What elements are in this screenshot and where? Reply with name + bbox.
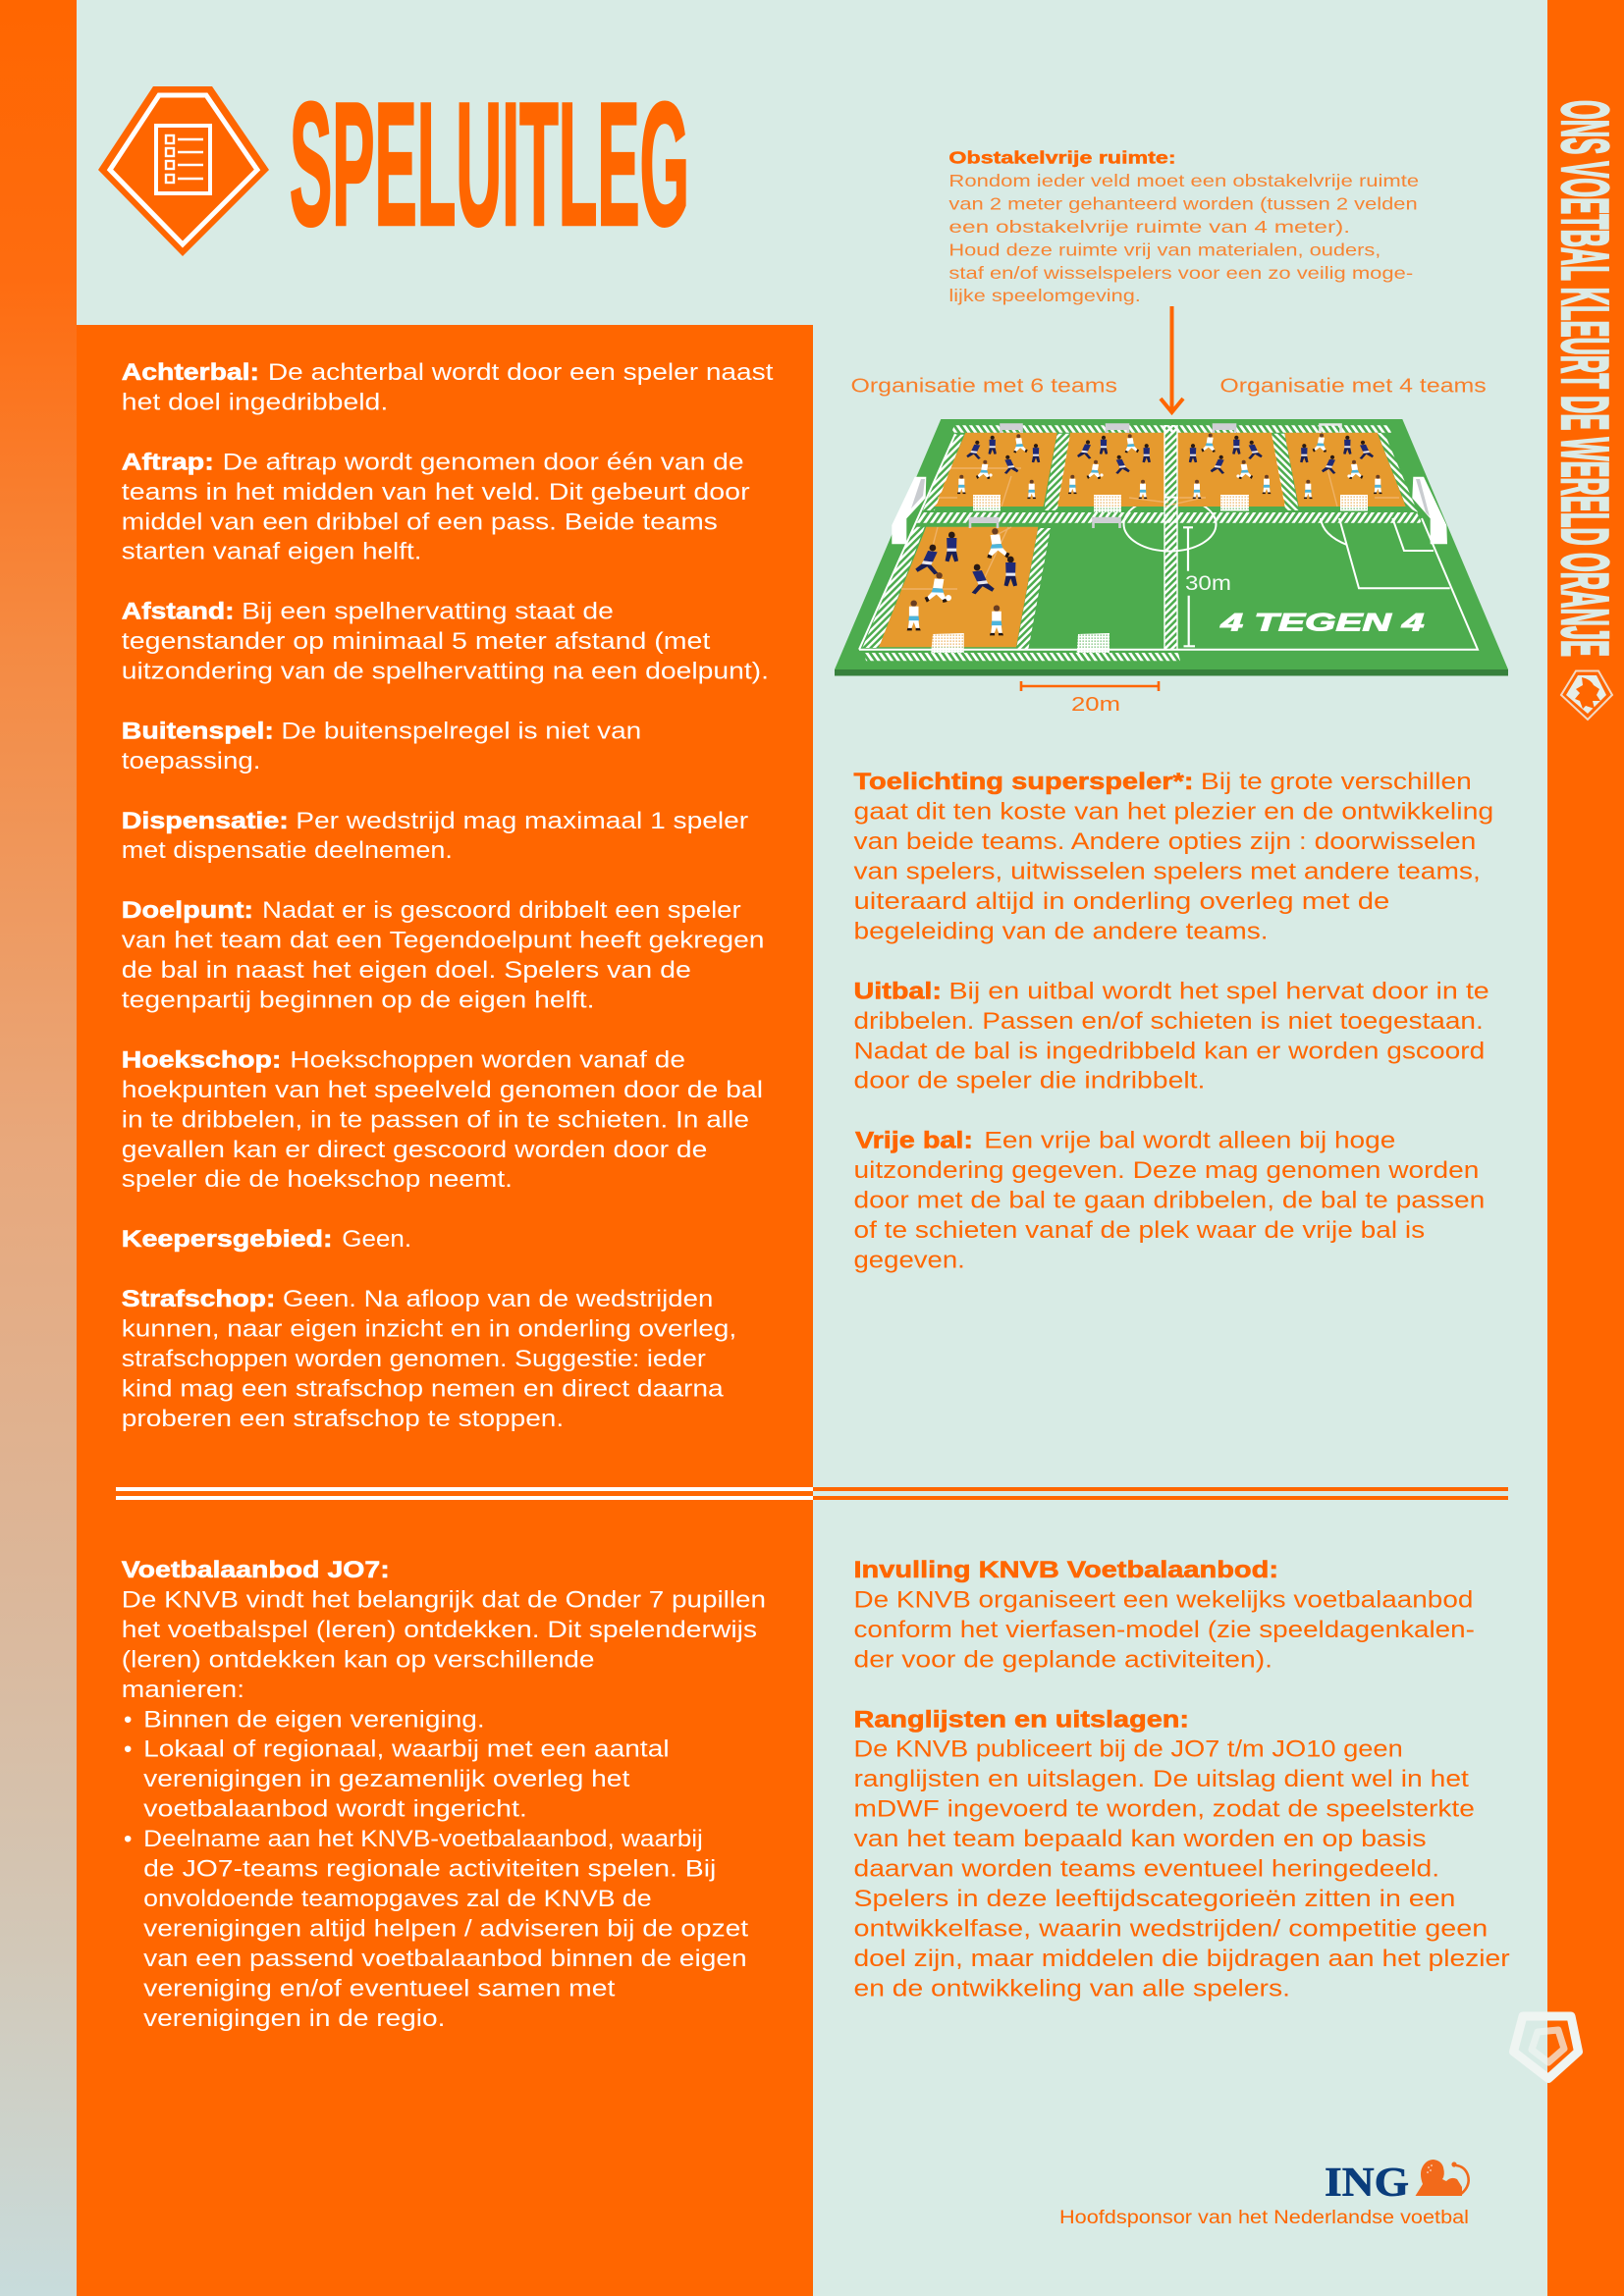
- rule: buitenspel: Buitenspel:: [122, 718, 274, 744]
- text block: obstacle-free space: [948, 147, 1419, 305]
- text block: voetbalaanbod JO7: •: [124, 1736, 132, 1763]
- text block: voetbalaanbod JO7: manieren:: [122, 1677, 244, 1703]
- text block: invulling KNVB voetbalaanbod: conform het vierfasen-model (zie speeldagenkalen-: [853, 1617, 1475, 1643]
- text: SPELUITLEG: [290, 67, 689, 261]
- text block: voetbalaanbod JO7: Voetbalaanbod JO7:: [122, 1557, 390, 1583]
- rule: aftrap: middel van een dribbel of een pass. Beide teams: [122, 508, 718, 535]
- rule: hoekschop: in te dribbelen, in te passen of in te schieten. In alle: [122, 1106, 749, 1133]
- rule: achterbal: [122, 359, 774, 415]
- rule: keepersgebied: Keepersgebied:: [122, 1226, 333, 1253]
- rule: keepersgebied: [122, 1226, 411, 1253]
- text block: voetbalaanbod JO7: •: [124, 1706, 132, 1733]
- rule: vrije bal: gegeven.: [853, 1247, 965, 1273]
- caption: main sponsor: Hoofdsponsor van het Nederlandse voetbal: [1059, 2208, 1469, 2228]
- rule: doelpunt: van het team dat een Tegendoelpunt heeft gekregen: [122, 928, 765, 954]
- goals: [892, 424, 1447, 653]
- label: organisation 4 teams: Organisatie met 4 teams: [1219, 376, 1487, 398]
- text block: voetbalaanbod JO7: [122, 1557, 766, 2032]
- text block: obstacle-free space: Obstakelvrije ruimte:: [948, 147, 1176, 167]
- rule: hoekschop: gevallen kan er direct gescoord worden door de: [122, 1137, 707, 1163]
- rule: doelpunt: de bal in naast het eigen doel. Spelers van de: [122, 957, 691, 984]
- measure: 20m: [1021, 681, 1159, 716]
- hatched team zones: [862, 425, 1422, 661]
- rule: buitenspel: [122, 718, 641, 774]
- text block: ranglijsten en uitslagen: De KNVB publiceert bij de JO7 t/m JO10 geen: [853, 1736, 1403, 1763]
- text block: voetbalaanbod JO7: Lokaal of regionaal, waarbij met een aantal: [143, 1736, 670, 1763]
- text block: voetbalaanbod JO7: verenigingen in de regio.: [143, 2005, 445, 2032]
- rule: strafschop: strafschoppen worden genomen. Suggestie: ieder: [122, 1346, 706, 1372]
- rule: aftrap: starten vanaf eigen helft.: [122, 539, 422, 565]
- rule: superspeler: Bij te grote verschillen: [1201, 769, 1472, 795]
- text block: voetbalaanbod JO7: De KNVB vindt het belangrijk dat de Onder 7 pupillen: [122, 1586, 766, 1613]
- rule: aftrap: Aftrap:: [122, 449, 214, 475]
- text block: voetbalaanbod JO7: het voetbalspel (leren) ontdekken. Dit spelenderwijs: [122, 1617, 757, 1643]
- rule: vrije bal: of te schieten vanaf de plek waar de vrije bal is: [853, 1217, 1425, 1244]
- text: ONS VOETBAL KLEURT DE WERELD ORANJE: [1547, 100, 1622, 657]
- rule: achterbal: De achterbal wordt door een speler naast: [268, 359, 774, 386]
- rule: strafschop: kunnen, naar eigen inzicht en in onderling overleg,: [122, 1316, 736, 1343]
- label: organisation 6 teams: Organisatie met 6 teams: [851, 376, 1117, 398]
- text block: rules right column: [853, 769, 1493, 1273]
- rule: superspeler: van spelers, uitwisselen spelers met andere teams,: [853, 859, 1481, 885]
- rule: superspeler: van beide teams. Andere opties zijn : doorwisselen: [853, 828, 1476, 855]
- rule: vrije bal: Vrije bal:: [855, 1128, 973, 1154]
- icon: pentagon logo on strip edge: [1514, 2016, 1579, 2079]
- text block: ranglijsten en uitslagen: van het team bepaald kan worden en op basis: [853, 1826, 1427, 1852]
- rule: strafschop: Strafschop:: [122, 1286, 275, 1312]
- text block: voetbalaanbod JO7: Deelname aan het KNVB-voetbalaanbod, waarbij: [143, 1826, 703, 1852]
- text block: obstacle-free space: lijke speelomgeving.: [948, 286, 1141, 305]
- rule: hoekschop: hoekpunten van het speelveld genomen door de bal: [122, 1077, 763, 1103]
- measure line: 30m: [1183, 527, 1195, 646]
- rule: strafschop: Geen. Na afloop van de wedstrijden: [283, 1286, 713, 1312]
- text block: ranglijsten en uitslagen: ontwikkelfase, waarin wedstrijden/ competitie geen: [853, 1915, 1488, 1942]
- text block: voetbalaanbod JO7: •: [124, 1826, 132, 1852]
- rule: superspeler: gaat dit ten koste van het plezier en de ontwikkeling: [853, 799, 1493, 826]
- rule: achterbal: het doel ingedribbeld.: [122, 389, 388, 415]
- rule: hoekschop: Hoekschop:: [122, 1047, 281, 1074]
- text block: ranglijsten en uitslagen: en de ontwikkeling van alle spelers.: [853, 1975, 1290, 2002]
- text block: obstacle-free space: staf en/of wisselspelers voor een zo veilig moge-: [948, 263, 1413, 283]
- text block: ranglijsten en uitslagen: Spelers in deze leeftijdscategorieën zitten in een: [853, 1886, 1455, 1912]
- rule: vrije bal: uitzondering gegeven. Deze mag genomen worden: [853, 1157, 1479, 1184]
- rule: vrije bal: Een vrije bal wordt alleen bij hoge: [984, 1128, 1395, 1154]
- rule: buitenspel: De buitenspelregel is niet van: [281, 718, 641, 744]
- text block: voetbalaanbod JO7: de JO7-teams regionale activiteiten spelen. Bij: [143, 1856, 716, 1883]
- rule: afstand: [122, 599, 769, 685]
- rule: keepersgebied: Geen.: [342, 1226, 411, 1253]
- text block: obstacle-free space: Houd deze ruimte vrij van materialen, ouders,: [948, 240, 1380, 259]
- arrow: pointing to field: [1161, 306, 1183, 412]
- label: 4 tegen 4: 4 TEGEN 4: [1219, 609, 1425, 636]
- panel: left orange column: [77, 325, 813, 2296]
- chart: 4 v 4 field layout: [835, 419, 1508, 675]
- left gradient strip: [0, 0, 77, 2296]
- text block: voetbalaanbod JO7: van een passend voetbalaanbod binnen de eigen: [143, 1946, 747, 1972]
- text block: voetbalaanbod JO7: (leren) ontdekken kan op verschillende: [122, 1646, 595, 1673]
- text block: invulling KNVB voetbalaanbod: [853, 1557, 1475, 1673]
- rule: doelpunt: tegenpartij beginnen op de eigen helft.: [122, 988, 595, 1014]
- icon: rules checklist badge: [98, 86, 269, 256]
- icon: KNVB lion badge small: [1561, 671, 1612, 720]
- rule: afstand: Afstand:: [122, 599, 235, 625]
- rule: doelpunt: Doelpunt:: [122, 897, 253, 924]
- rule: afstand: uitzondering van de spelhervatting na een doelpunt).: [122, 659, 769, 685]
- rule: aftrap: teams in het midden van het veld. Dit gebeurt door: [122, 479, 750, 506]
- right orange strip: [1547, 0, 1624, 2296]
- rule: hoekschop: Hoekschoppen worden vanaf de: [290, 1047, 685, 1074]
- rule: aftrap: [122, 449, 750, 565]
- text block: ranglijsten en uitslagen: Ranglijsten en uitslagen:: [853, 1706, 1189, 1733]
- rule: afstand: tegenstander op minimaal 5 meter afstand (met: [122, 628, 711, 655]
- text block: obstacle-free space: van 2 meter gehanteerd worden (tussen 2 velden: [948, 193, 1418, 213]
- rule: uitbal: Bij en uitbal wordt het spel hervat door in te: [948, 978, 1489, 1004]
- text block: ranglijsten en uitslagen: [853, 1706, 1510, 2002]
- rule: afstand: Bij een spelhervatting staat de: [242, 599, 614, 625]
- text block: voetbalaanbod JO7: verenigingen altijd helpen / adviseren bij de opzet: [143, 1915, 748, 1942]
- text block: voetbalaanbod JO7: vereniging en/of eventueel samen met: [143, 1975, 616, 2002]
- text block: voetbalaanbod JO7: Binnen de eigen vereniging.: [143, 1706, 485, 1733]
- text block: voetbalaanbod JO7: voetbalaanbod wordt ingericht.: [143, 1796, 527, 1823]
- pitch base: [835, 419, 1508, 675]
- text block: invulling KNVB voetbalaanbod: der voor de geplande activiteiten).: [853, 1646, 1272, 1673]
- rule: uitbal: [853, 978, 1489, 1095]
- players: [907, 434, 1382, 635]
- full pitch lines: [859, 434, 1478, 650]
- rule: strafschop: proberen een strafschop te stoppen.: [122, 1406, 564, 1432]
- rule: dispensatie: Per wedstrijd mag maximaal 1 speler: [296, 808, 748, 834]
- rule: uitbal: dribbelen. Passen en/of schieten is niet toegestaan.: [853, 1008, 1484, 1035]
- rule: uitbal: door de speler die indribbelt.: [853, 1068, 1205, 1095]
- rule: achterbal: Achterbal:: [122, 359, 259, 386]
- faint lines on mini pitches: [901, 468, 1399, 589]
- rule: doelpunt: [122, 897, 765, 1014]
- text block: ranglijsten en uitslagen: daarvan worden teams eventueel heringedeeld.: [853, 1856, 1439, 1883]
- text block: obstacle-free space: Rondom ieder veld moet een obstakelvrije ruimte: [948, 171, 1419, 190]
- text block: invulling KNVB voetbalaanbod: Invulling KNVB Voetbalaanbod:: [853, 1557, 1278, 1583]
- text block: rules left column: [122, 359, 774, 1432]
- text block: obstacle-free space: een obstakelvrije ruimte van 4 meter).: [948, 217, 1350, 237]
- rule: strafschop: [122, 1286, 736, 1432]
- rule: strafschop: kind mag een strafschop nemen en direct daarna: [122, 1375, 725, 1402]
- text block: ranglijsten en uitslagen: ranglijsten en uitslagen. De uitslag dient wel in het: [853, 1766, 1469, 1792]
- logo: ING lion sponsor: ING: [1325, 2161, 1409, 2206]
- rule: superspeler: [853, 769, 1493, 944]
- rule: uitbal: Uitbal:: [853, 978, 942, 1004]
- rule: dispensatie: met dispensatie deelnemen.: [122, 837, 453, 864]
- orange mini pitches: [879, 433, 1406, 647]
- divider lines: [116, 1487, 1508, 1500]
- rule: uitbal: Nadat de bal is ingedribbeld kan er worden gscoord: [853, 1038, 1485, 1064]
- rule: vrije bal: [853, 1128, 1485, 1273]
- rule: superspeler: begeleiding van de andere teams.: [853, 918, 1269, 944]
- rule: dispensatie: Dispensatie:: [122, 808, 289, 834]
- rule: hoekschop: speler die de hoekschop neemt.: [122, 1166, 513, 1193]
- measure: 20m: 20m: [1071, 694, 1120, 716]
- rule: doelpunt: Nadat er is gescoord dribbelt een speler: [262, 897, 741, 924]
- rule: aftrap: De aftrap wordt genomen door één van de: [223, 449, 744, 475]
- text block: voetbalaanbod JO7: verenigingen in gezamenlijk overleg het: [143, 1766, 630, 1792]
- logo: ING lion sponsor: [1325, 2160, 1469, 2206]
- text block: voetbalaanbod JO7: onvoldoende teamopgaves zal de KNVB de: [143, 1886, 652, 1912]
- rule: superspeler: Toelichting superspeler*:: [853, 769, 1193, 795]
- rule: vrije bal: door met de bal te gaan dribbelen, de bal te passen: [853, 1188, 1485, 1214]
- text block: invulling KNVB voetbalaanbod: De KNVB organiseert een wekelijks voetbalaanbod: [853, 1586, 1473, 1613]
- rule: hoekschop: [122, 1047, 763, 1193]
- text block: ranglijsten en uitslagen: doel zijn, maar middelen die bijdragen aan het plezier: [853, 1946, 1510, 1972]
- text block: ranglijsten en uitslagen: mDWF ingevoerd te worden, zodat de speelsterkte: [853, 1796, 1475, 1823]
- rule: superspeler: uiteraard altijd in onderling overleg met de: [853, 888, 1389, 915]
- rule: buitenspel: toepassing.: [122, 748, 260, 774]
- label: 30m: 30m: [1185, 571, 1231, 595]
- rule: dispensatie: [122, 808, 748, 864]
